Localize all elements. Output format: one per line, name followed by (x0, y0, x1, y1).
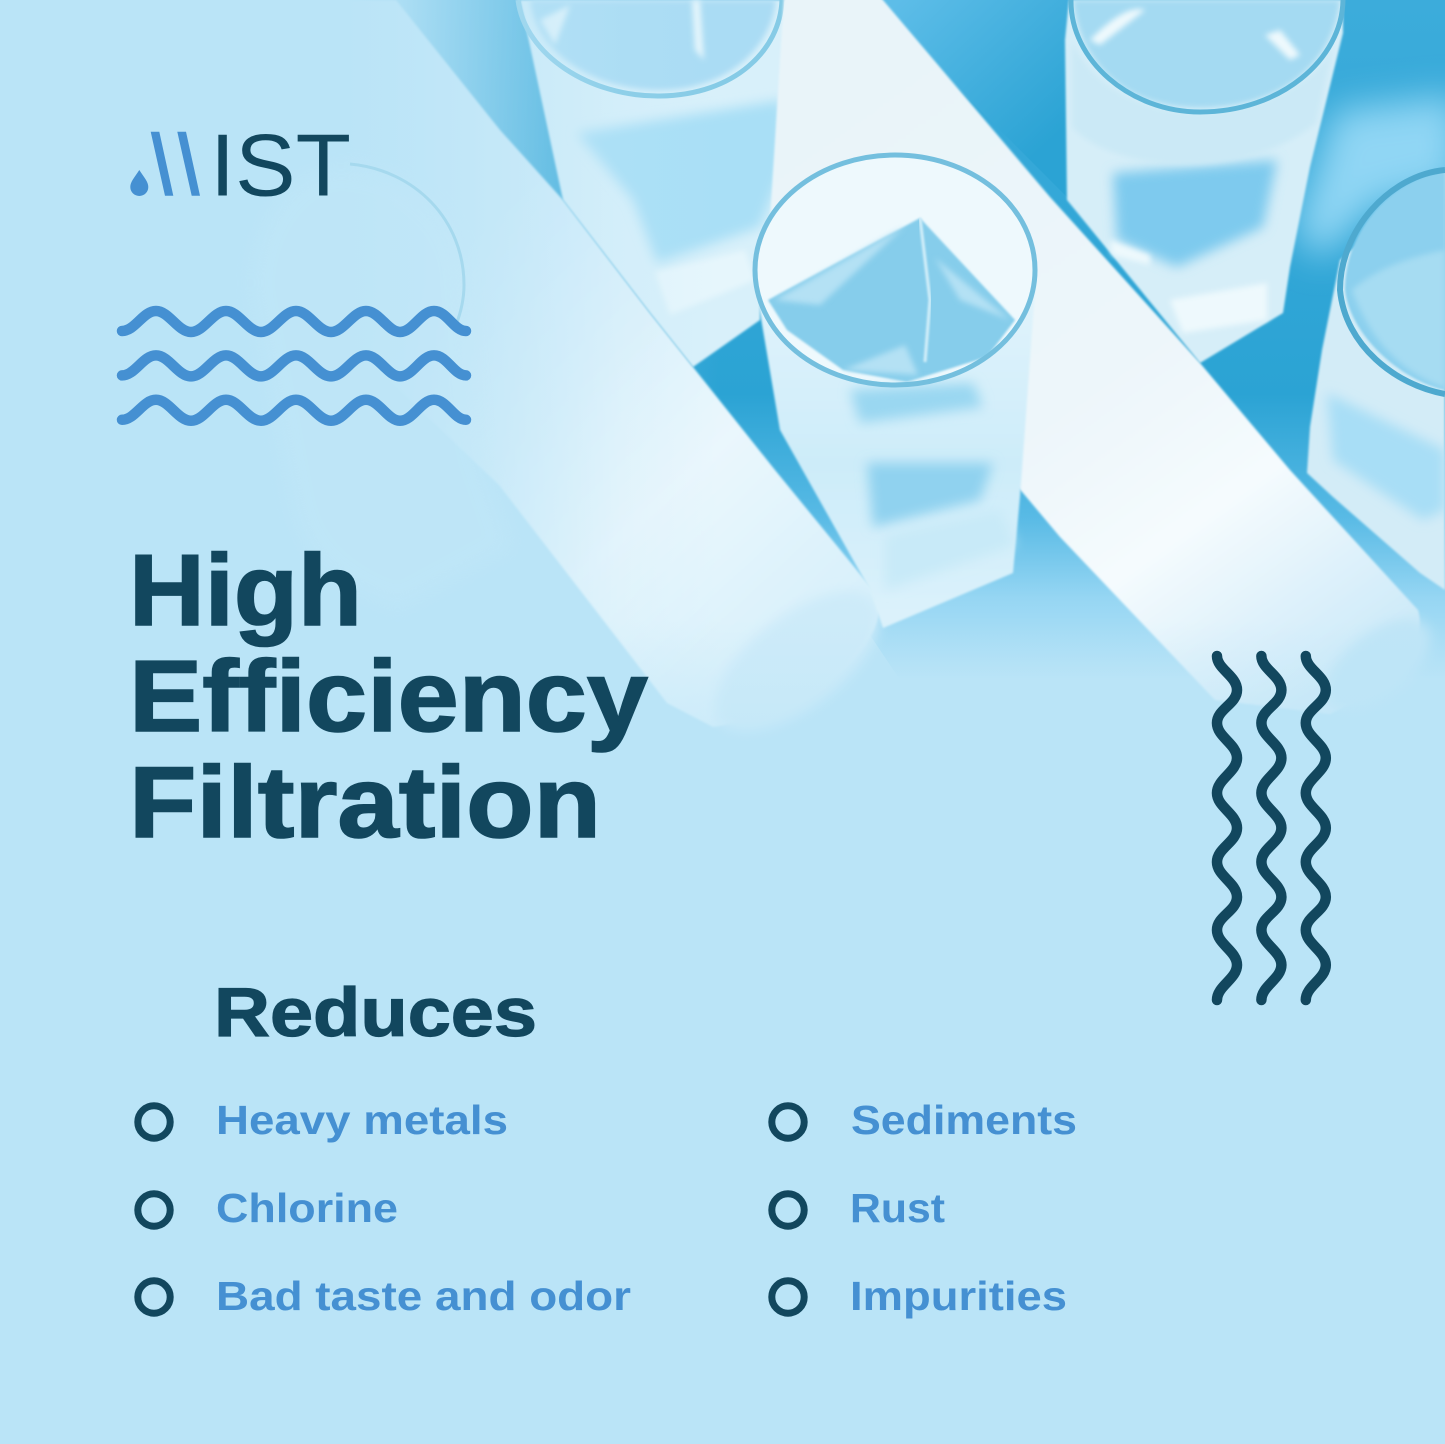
title: Efficiency (129, 641, 648, 753)
water surface (768, 218, 1015, 382)
wave decoration: horizontal blue (122, 311, 466, 421)
photo backdrop (330, 0, 1445, 680)
logo slanted bars (151, 132, 200, 196)
filter tube left (367, 0, 878, 726)
title: High (129, 535, 362, 647)
photo: water glasses and filter cartridges (397, 0, 1445, 728)
item: Impurities (772, 1273, 1067, 1319)
item: Sediments: Sediments (851, 1097, 1077, 1143)
glass top middle (518, 0, 790, 367)
rim (755, 155, 1035, 385)
water (1113, 160, 1277, 267)
body (520, 0, 790, 367)
interior (530, 0, 776, 90)
fade bottom (662, 691, 728, 726)
lighter shadow top (882, 0, 1066, 194)
wave decoration: vertical dark (1217, 656, 1326, 1000)
interior (1345, 172, 1445, 390)
refraction (850, 383, 983, 423)
base (886, 518, 1020, 586)
heading: Reduces: Reduces (214, 974, 537, 1051)
interior (1073, 0, 1340, 108)
item: Sediments (772, 1097, 1077, 1143)
item: Rust: Rust (850, 1185, 945, 1231)
water line (1074, 54, 1327, 166)
light band at top right (1295, 95, 1445, 260)
list: right column (772, 1097, 1077, 1319)
title: Filtration (129, 747, 601, 859)
rim (1340, 170, 1445, 394)
lower water (1327, 393, 1445, 520)
faded glass body (250, 166, 514, 610)
item: Heavy metals: Heavy metals (216, 1097, 508, 1143)
faded glass at left (250, 164, 514, 610)
glass far right (1307, 170, 1445, 590)
body (1307, 170, 1445, 590)
filter tube right (770, 0, 1420, 714)
logo: MIST (130, 116, 351, 215)
water facets (775, 226, 1010, 375)
water (577, 100, 787, 263)
interior (758, 220, 1032, 382)
item: Impurities: Impurities (850, 1273, 1067, 1319)
logo wordmark: IST (210, 116, 351, 215)
tube end cap right (1330, 620, 1432, 700)
body (758, 298, 1034, 628)
item: Chlorine (138, 1185, 398, 1231)
tube end cap left (722, 595, 882, 728)
item: Rust (772, 1185, 945, 1231)
title (129, 535, 648, 859)
inner water (1352, 250, 1445, 388)
list: left column (138, 1097, 631, 1319)
glass top right (1065, 0, 1343, 363)
rim (1071, 0, 1343, 112)
item: Bad taste and odor: Bad taste and odor (216, 1273, 631, 1319)
faded glass rim (350, 164, 464, 325)
highlights (1090, 9, 1300, 333)
rim (518, 0, 782, 96)
item: Chlorine: Chlorine (216, 1185, 398, 1231)
highlights (540, 0, 755, 315)
glass centre (753, 154, 1037, 628)
logo water drop (130, 170, 148, 196)
body (1065, 0, 1343, 363)
fade left (200, 0, 622, 624)
